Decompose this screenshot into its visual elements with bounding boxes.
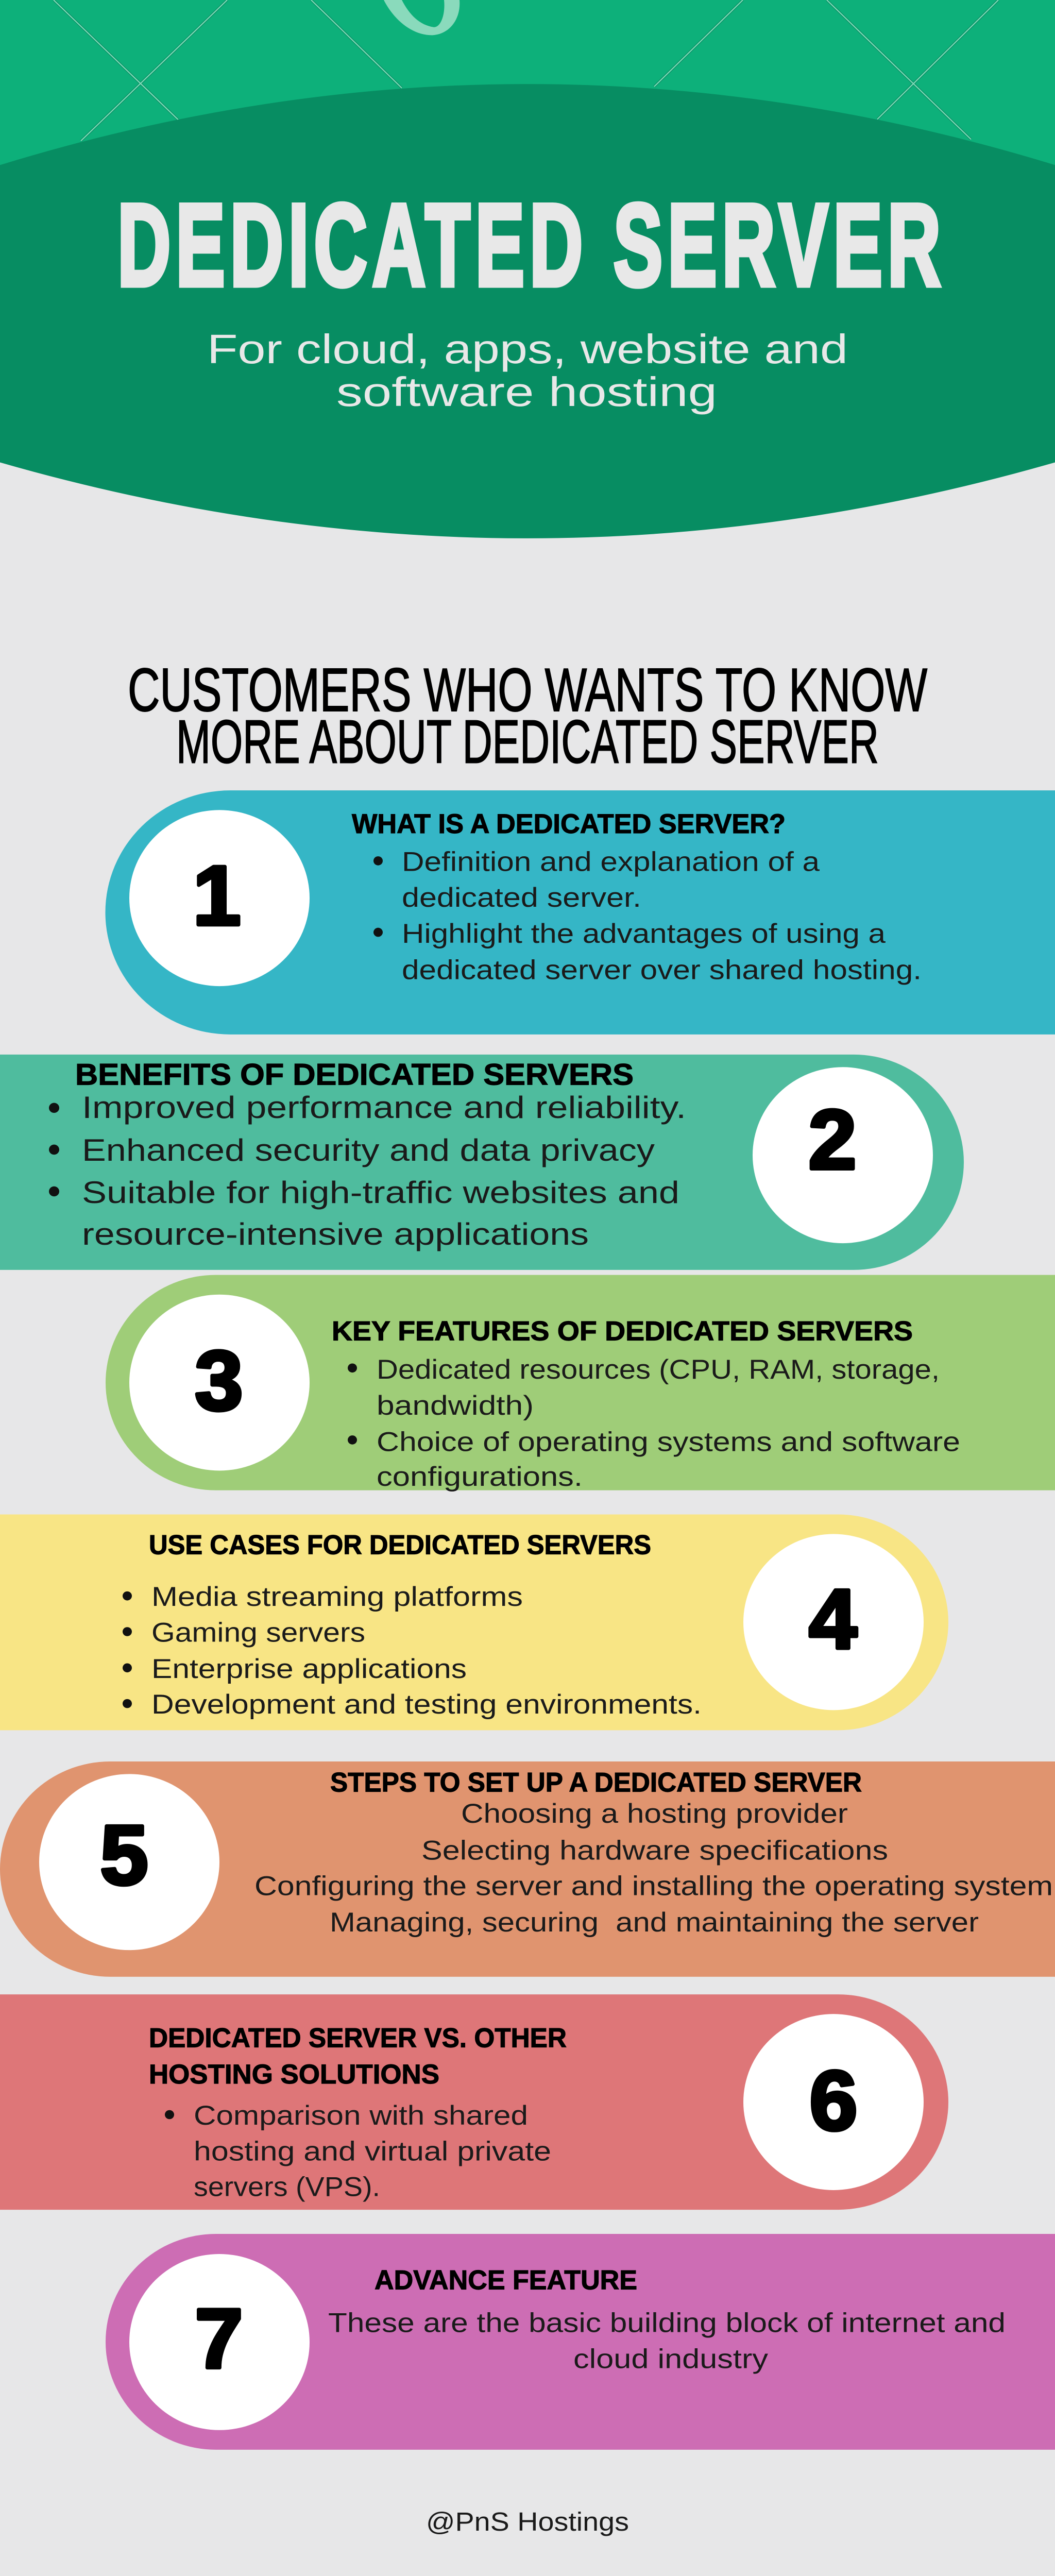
- number badge 7: [129, 2254, 310, 2430]
- panel: 5 setup steps: [0, 1761, 1055, 1977]
- number badge 6: 6: [809, 2054, 858, 2148]
- bullet list 4: Gaming servers: [151, 1618, 365, 1648]
- heading 6: HOSTING SOLUTIONS: [149, 2060, 439, 2090]
- heading 1: WHAT IS A DEDICATED SERVER?: [352, 809, 786, 839]
- header banner: [0, 0, 1055, 538]
- panel: 1 what is a dedicated server: [106, 790, 1055, 1035]
- bullet list 3: Choice of operating systems and software: [377, 1427, 960, 1457]
- bullet list 3: bandwidth): [377, 1391, 534, 1421]
- bullet list 2: Improved performance and reliability.: [82, 1090, 686, 1125]
- dark green lens shape: [0, 84, 1055, 538]
- bullet list 3: Dedicated resources (CPU, RAM, storage,: [377, 1354, 940, 1385]
- heading 6: [149, 2023, 567, 2090]
- heading 2: BENEFITS OF DEDICATED SERVERS: [75, 1057, 634, 1091]
- bullet list 2: resource-intensive applications: [82, 1217, 589, 1251]
- bullet list 4: [123, 1582, 702, 1720]
- bullet list 6: servers (VPS).: [194, 2172, 380, 2202]
- number badge 4: 4: [809, 1572, 857, 1667]
- panel: 4 use cases: [0, 1514, 948, 1730]
- subtitle: software hosting: [336, 369, 717, 415]
- heading 6: DEDICATED SERVER VS. OTHER: [149, 2023, 567, 2053]
- bullet list 1: dedicated server.: [402, 883, 641, 913]
- bullet list 1: dedicated server over shared hosting.: [402, 955, 922, 985]
- centered steps list: Selecting hardware specifications: [421, 1836, 888, 1866]
- number badge 4: [743, 1534, 924, 1710]
- section heading: [128, 655, 927, 776]
- number badge 3: 3: [195, 1334, 243, 1428]
- footer credit: @PnS Hostings: [426, 2507, 629, 2536]
- bullet list 4: Development and testing environments.: [151, 1690, 702, 1720]
- centered steps list: [254, 1799, 1053, 1938]
- bullet list 1: Highlight the advantages of using a: [402, 919, 886, 949]
- bullet list 1: [373, 847, 922, 985]
- bullet list 4: Enterprise applications: [151, 1654, 467, 1684]
- number badge 5: 5: [100, 1808, 148, 1903]
- description 7: [328, 2308, 1006, 2375]
- number badge 5: [39, 1774, 219, 1950]
- icon: swirl loop: [384, 0, 460, 35]
- bullet list 6: hosting and virtual private: [194, 2137, 551, 2166]
- centered steps list: Managing, securing and maintaining the server: [330, 1908, 979, 1938]
- heading 7: ADVANCE FEATURE: [375, 2265, 637, 2295]
- number badge 2: 2: [808, 1093, 857, 1187]
- number badge 7: 7: [195, 2292, 243, 2386]
- panel: 7 advance feature: [106, 2234, 1055, 2450]
- bullet list 6: [165, 2101, 551, 2202]
- bullet list 3: [348, 1354, 960, 1492]
- panel: 3 key features: [106, 1275, 1055, 1492]
- heading 4: USE CASES FOR DEDICATED SERVERS: [149, 1530, 651, 1560]
- number badge 1: 1: [193, 849, 241, 943]
- heading 5: STEPS TO SET UP A DEDICATED SERVER: [330, 1768, 862, 1798]
- subtitle: For cloud, apps, website and: [207, 327, 848, 372]
- bullet list 2: [49, 1090, 686, 1251]
- panel: 2 benefits: [0, 1055, 964, 1270]
- number badge 2: [753, 1067, 933, 1243]
- description 7: cloud industry: [573, 2344, 768, 2375]
- number badge 1: [129, 810, 310, 986]
- bullet list 1: Definition and explanation of a: [402, 847, 820, 877]
- panel: 6 comparison: [0, 1994, 948, 2210]
- bullet list 3: configurations.: [377, 1462, 583, 1492]
- heading 3: KEY FEATURES OF DEDICATED SERVERS: [332, 1316, 913, 1346]
- number badge 3: [129, 1295, 310, 1470]
- centered steps list: Choosing a hosting provider: [461, 1799, 848, 1829]
- bullet list 2: Suitable for high-traffic websites and: [82, 1175, 679, 1210]
- bullet list 4: Media streaming platforms: [151, 1582, 523, 1612]
- bullet list 6: Comparison with shared: [194, 2101, 528, 2131]
- subtitle: [207, 327, 848, 415]
- number badge 6: [743, 2014, 924, 2190]
- bullet list 2: Enhanced security and data privacy: [82, 1133, 655, 1167]
- centered steps list: Configuring the server and installing the operating system: [254, 1871, 1053, 1902]
- description 7: These are the basic building block of internet and: [328, 2308, 1006, 2338]
